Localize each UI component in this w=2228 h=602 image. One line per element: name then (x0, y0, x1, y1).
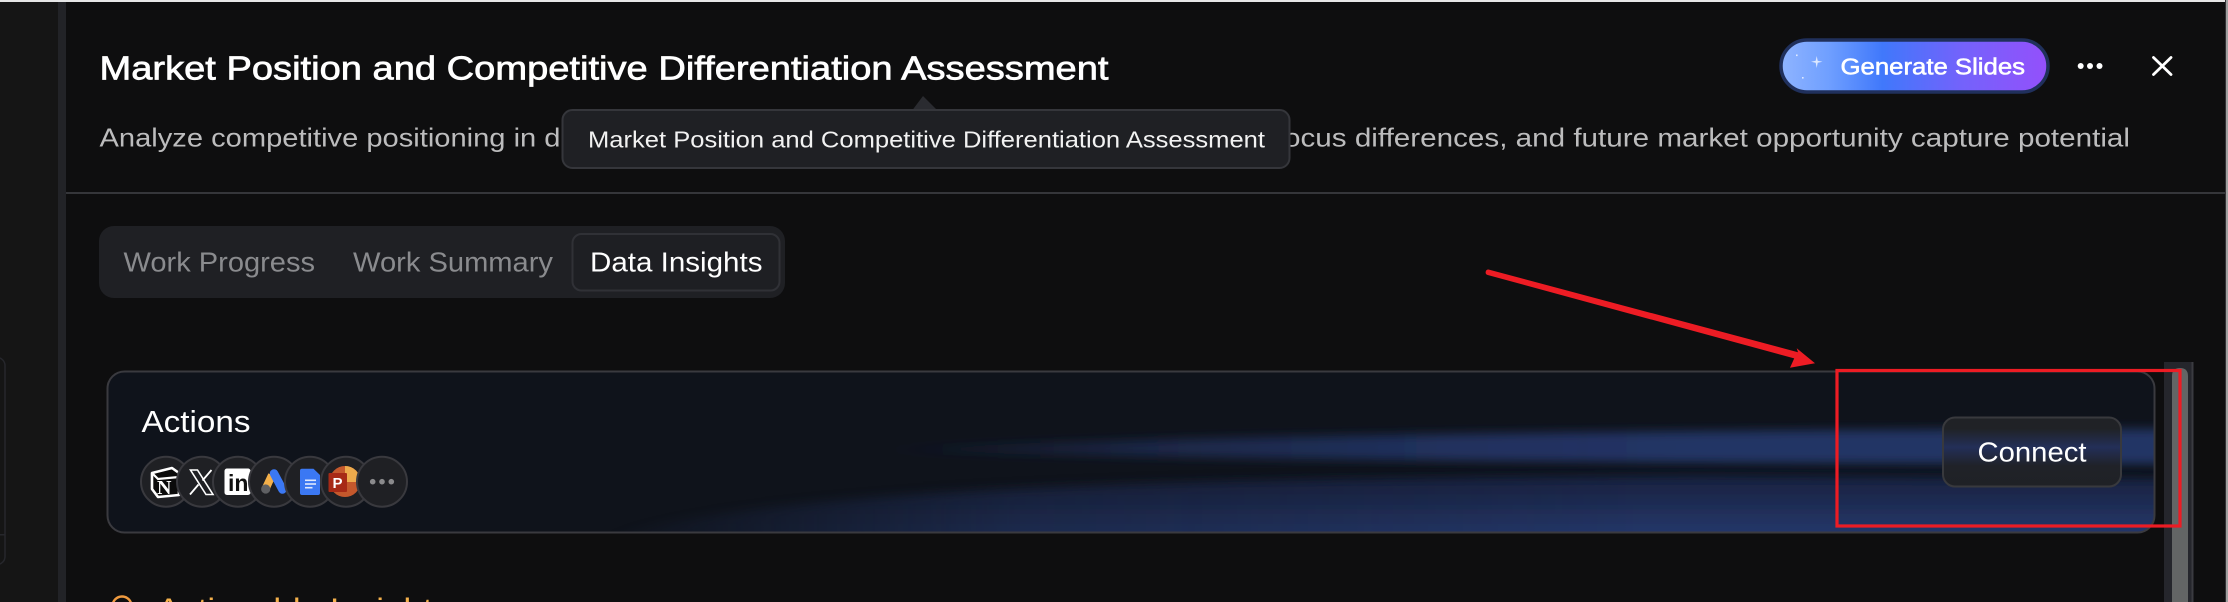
tooltip (562, 96, 1290, 168)
right window edge (2225, 0, 2228, 602)
panel: actions card (108, 372, 2170, 545)
tab: work summary: Work Summary (353, 247, 553, 278)
tooltip: Market Position and Competitive Differentiation Assessment (588, 126, 1266, 152)
integration icons (141, 457, 407, 507)
icon: x (177, 457, 227, 507)
icon: sparkle (1796, 54, 1822, 79)
icon: google ads (249, 457, 299, 507)
button: generate slides: Generate Slides (1840, 53, 2025, 79)
subtitle: ocus differences, and future market opportunity capture potential (1284, 122, 2130, 152)
header divider (66, 192, 2225, 194)
tab: work progress: Work Progress (124, 247, 315, 278)
annotation highlight box (1837, 370, 2180, 526)
tab: data insights active: Data Insights (590, 247, 762, 278)
icon: notion (141, 457, 191, 507)
card glow (676, 423, 2154, 532)
subtitle (100, 122, 2130, 152)
top window edge (0, 0, 2228, 2)
card heading: Actions (142, 404, 250, 439)
annotation arrow (1486, 269, 1815, 368)
icon: more options (2078, 63, 2102, 69)
button: generate slides (1781, 40, 2048, 92)
icon: close (2154, 58, 2171, 74)
icon: more integrations (357, 457, 407, 507)
connect button: Connect (1978, 437, 2087, 468)
tabs (99, 226, 785, 298)
icon: google docs (285, 457, 335, 507)
icon: powerpoint (321, 457, 371, 507)
tab: data insights active (572, 234, 780, 290)
left sidebar (0, 0, 66, 602)
scrollbar (2164, 362, 2194, 602)
title: Market Position and Competitive Differentiation Assessment (100, 50, 1108, 86)
connect button (1943, 418, 2121, 486)
icon: light bulb (112, 596, 132, 602)
section heading: actionable insights (112, 595, 429, 602)
icon: notion: N (157, 477, 172, 499)
icon: linkedin (213, 457, 263, 507)
icon: linkedin: in (228, 470, 248, 496)
icon: powerpoint: P (332, 475, 343, 492)
subtitle: Analyze competitive positioning in d (100, 122, 560, 152)
